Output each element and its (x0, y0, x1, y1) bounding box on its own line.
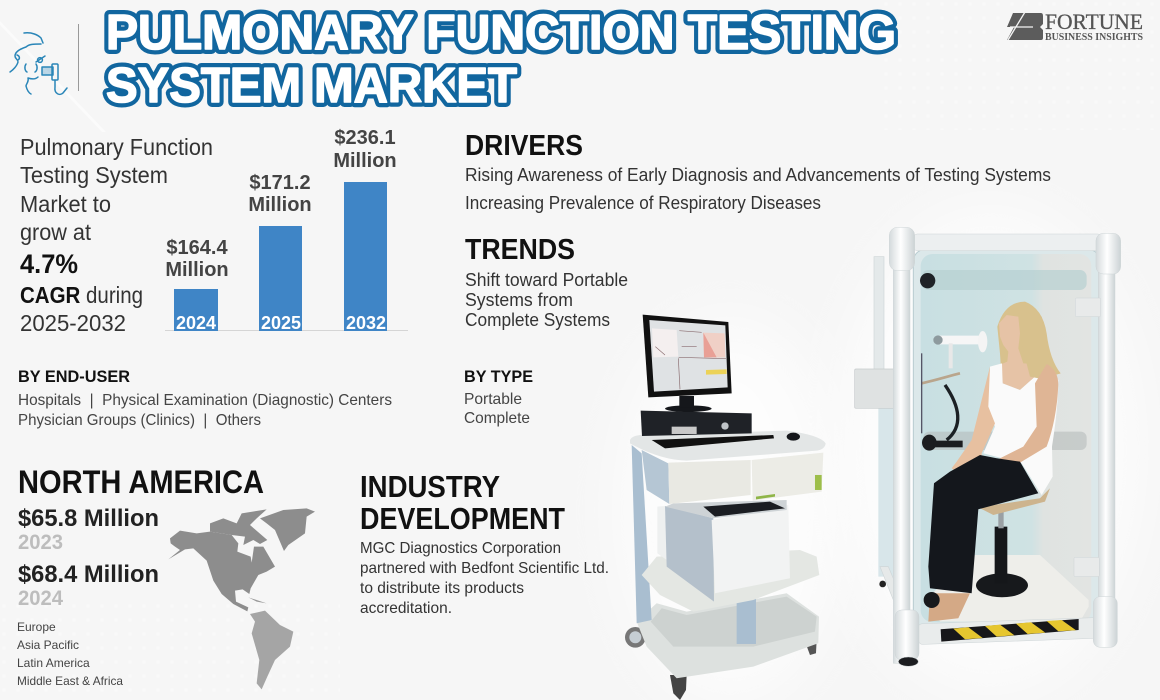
bar chart: 2032 (346, 313, 386, 333)
industry development: to distribute its products (360, 580, 524, 597)
industry development: DEVELOPMENT (360, 501, 565, 536)
drivers: DRIVERS (465, 130, 583, 162)
text block: market growth summary: 4.7% (20, 249, 78, 279)
trends: TRENDS (465, 234, 575, 266)
other regions list: Middle East & Africa (17, 674, 123, 688)
trends: Systems from (465, 290, 573, 310)
other regions list: Europe (17, 620, 56, 634)
rear wheel (625, 627, 646, 648)
text block: market growth summary: CAGR during (20, 282, 143, 308)
caution stripe (941, 619, 1079, 642)
shelf (642, 550, 819, 612)
trends: Complete Systems (465, 310, 610, 330)
north america stats: 2023 (18, 531, 63, 554)
bar chart: Million (333, 150, 397, 172)
industry development: accreditation. (360, 600, 452, 617)
north america stats: NORTH AMERICA (18, 464, 264, 500)
bar chart: 2025 (261, 313, 301, 333)
woman (924, 302, 1061, 622)
divider (78, 24, 79, 91)
other regions list: Latin America (17, 656, 90, 670)
computer (641, 411, 800, 448)
monitor (643, 315, 732, 412)
icon: patient using spirometer (10, 33, 67, 94)
bar chart (165, 127, 408, 333)
drivers: Increasing Prevalence of Respiratory Diseases (465, 193, 821, 213)
illustration: body plethysmograph booth with seated woman (855, 227, 1121, 666)
title: PULMONARY FUNCTION TESTING (106, 6, 896, 60)
by type (464, 367, 533, 427)
title: SYSTEM MARKET (106, 59, 517, 113)
glass cabin (913, 249, 1100, 628)
logo: Fortune Business Insights: BUSINESS INSIGHTS (1045, 32, 1143, 43)
illustration: pulmonary testing cart (625, 315, 826, 700)
industry development: MGC Diagnostics Corporation (360, 540, 561, 557)
drivers (465, 130, 1051, 213)
industry development: INDUSTRY (360, 469, 500, 504)
by type: BY TYPE (464, 367, 533, 386)
bottom tray (637, 593, 819, 700)
cart post (632, 445, 652, 623)
industry development (360, 469, 609, 617)
rear frame (855, 257, 907, 617)
bar chart: Million (165, 259, 229, 281)
logo: Fortune Business Insights (1007, 9, 1143, 43)
drawers (642, 450, 823, 504)
stool (976, 488, 1050, 597)
by end-user: Hospitals | Physical Examination (Diagnostic) Centers (18, 392, 392, 409)
north america stats: 2024 (18, 587, 63, 610)
by type: Portable (464, 391, 522, 408)
north america stats: $65.8 Million (18, 505, 159, 532)
trends: Shift toward Portable (465, 270, 628, 290)
bar chart: 2024 (176, 313, 216, 333)
text block: market growth summary (20, 134, 213, 336)
text block: market growth summary: Testing System (20, 162, 168, 188)
trends (465, 234, 628, 330)
bar chart: $236.1 (334, 127, 396, 149)
map: Americas (168, 508, 315, 689)
spirometer apparatus (922, 331, 987, 451)
text block: market growth summary: 2025-2032 (20, 310, 126, 336)
text block: market growth summary: Market to (20, 191, 111, 217)
text block: market growth summary: Pulmonary Function (20, 134, 213, 160)
title: SYSTEM MARKET (106, 59, 517, 113)
drivers: Rising Awareness of Early Diagnosis and Advancements of Testing Systems (465, 165, 1051, 185)
text block: market growth summary: grow at (20, 219, 92, 245)
bar chart: $164.4 (166, 237, 228, 259)
north america stats: $68.4 Million (18, 561, 159, 588)
by type: Complete (464, 410, 530, 427)
by end-user: Physician Groups (Clinics) | Others (18, 412, 261, 429)
industry development: partnered with Bedfont Scientific Ltd. (360, 560, 609, 577)
bar chart: Million (248, 194, 312, 216)
top plate (630, 431, 826, 461)
other regions list (17, 620, 123, 688)
north america stats (18, 464, 264, 610)
by end-user: BY END-USER (18, 367, 130, 386)
title (106, 6, 896, 113)
other regions list: Asia Pacific (17, 638, 79, 652)
title: PULMONARY FUNCTION TESTING (106, 6, 896, 60)
bar chart: $171.2 (249, 172, 311, 194)
center post (737, 597, 756, 644)
printer (657, 500, 790, 602)
logo: Fortune Business Insights: FORTUNE (1045, 9, 1143, 34)
by end-user (18, 367, 392, 429)
white tube frame (889, 227, 1121, 666)
